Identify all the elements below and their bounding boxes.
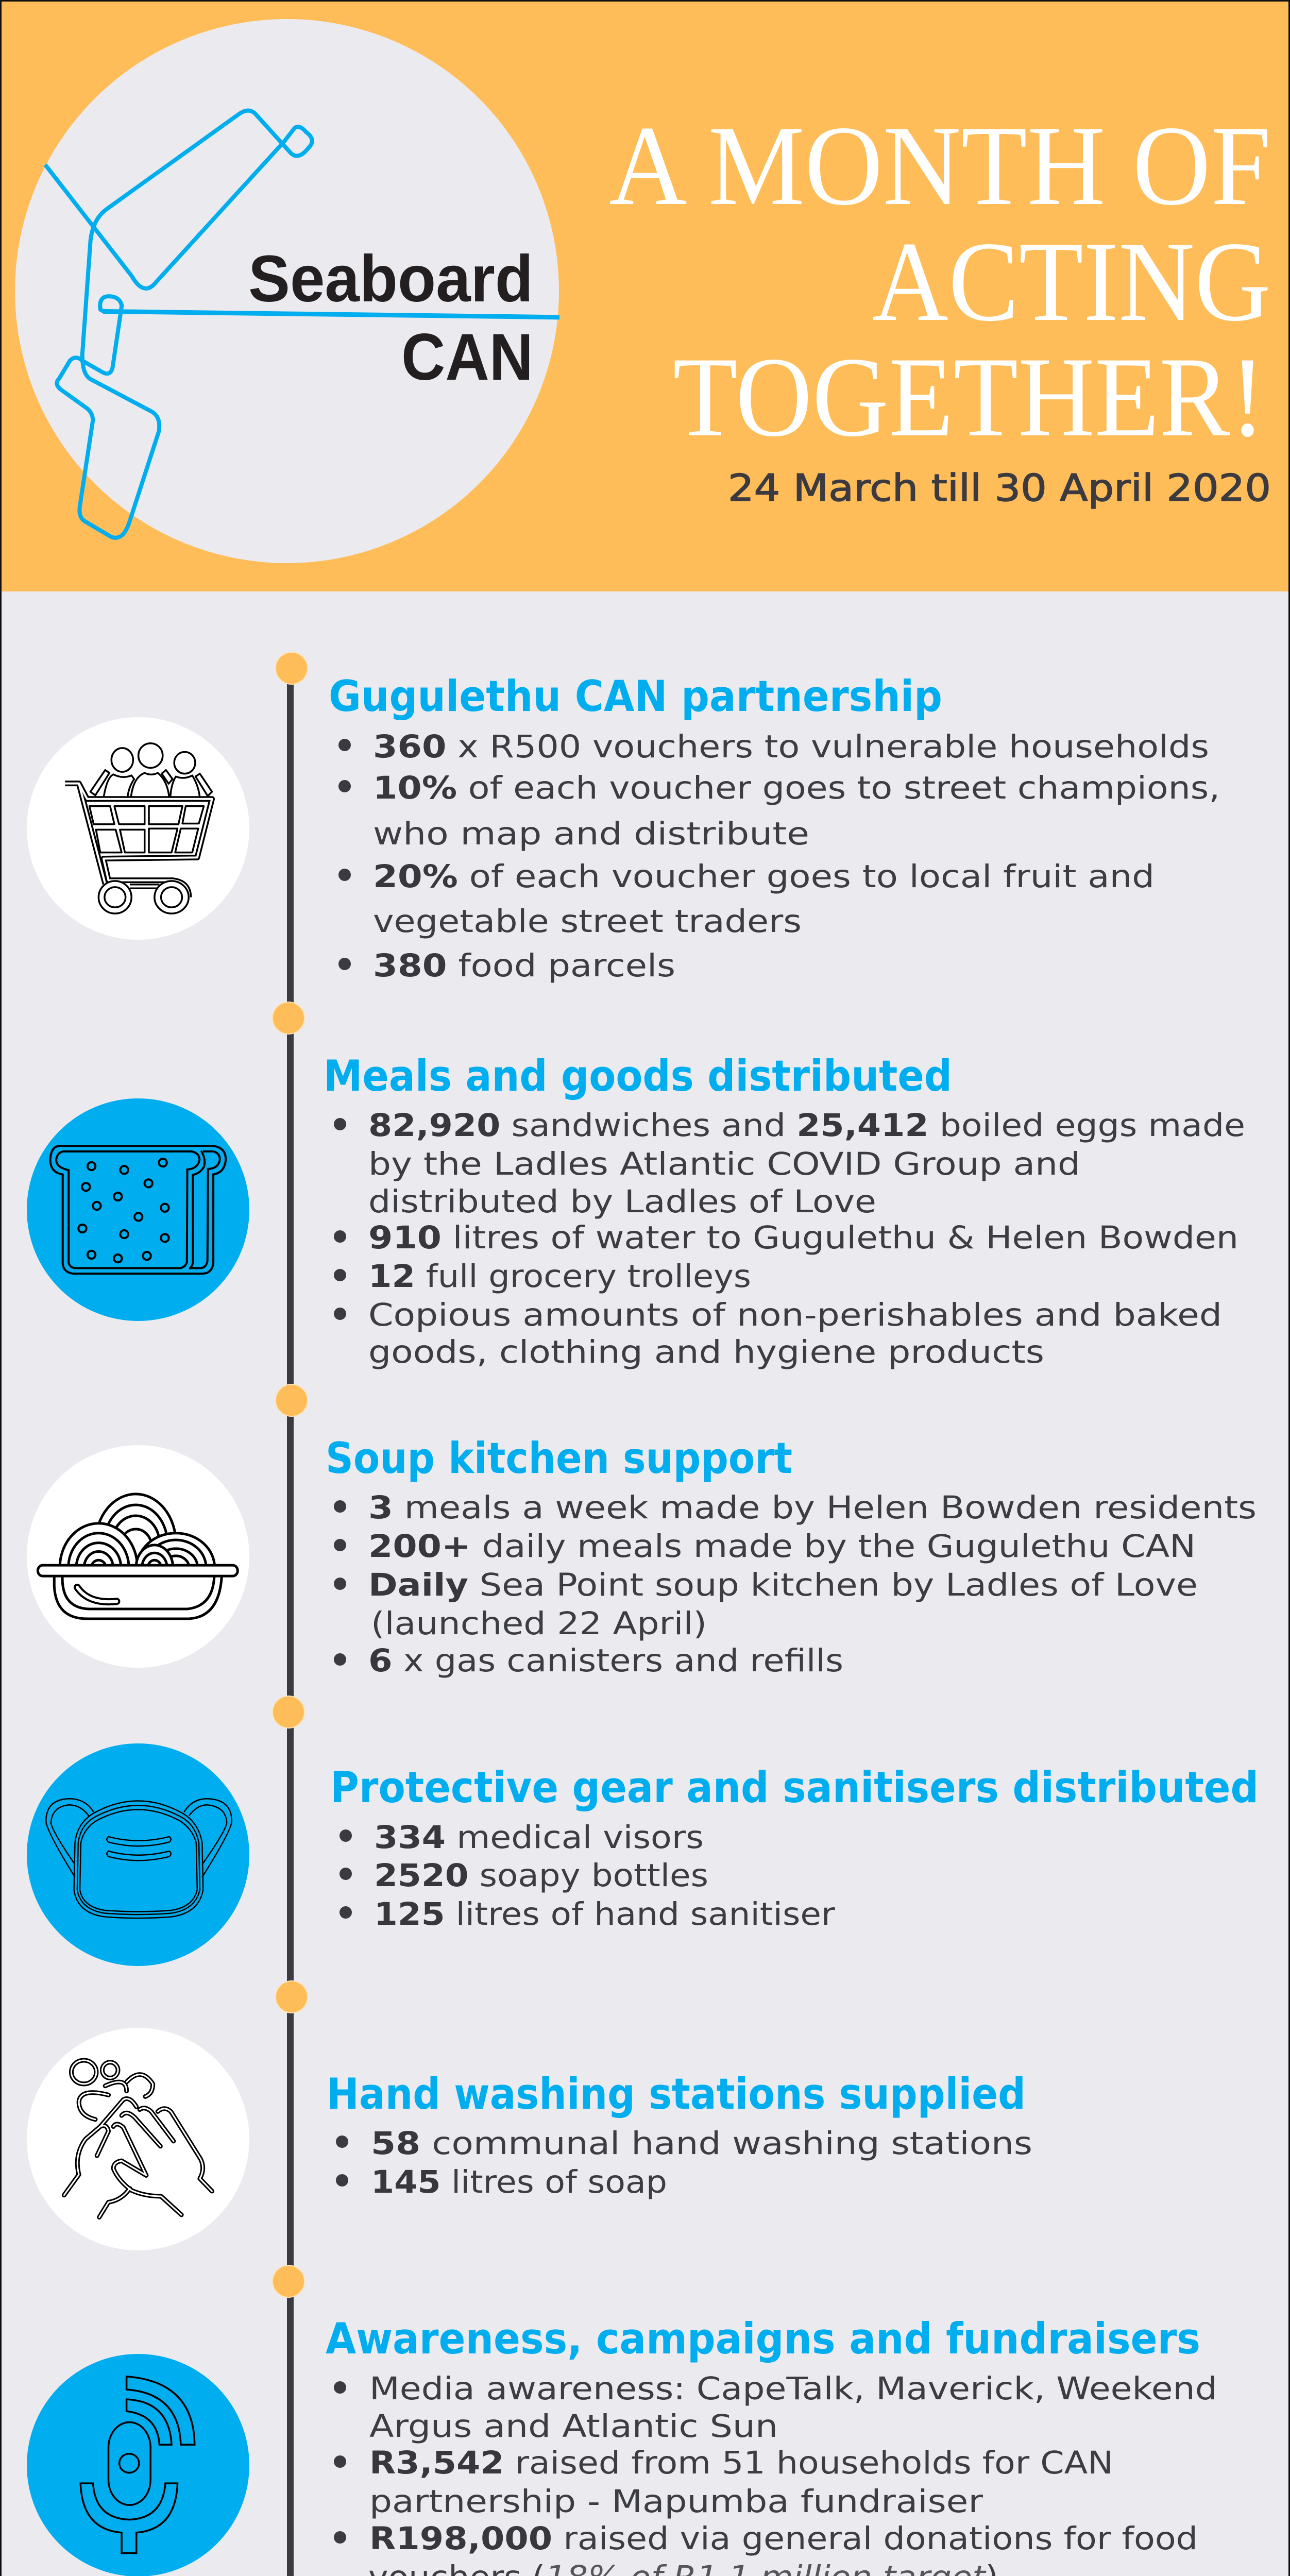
bullet list: 3 meals a week made by Helen Bowden residents (368, 1489, 1257, 1526)
logo: Seaboard CAN (15, 19, 559, 563)
heading: Hand washing stations supplied (327, 2069, 1026, 2119)
heading: Awareness, campaigns and fundraisers (326, 2314, 1200, 2364)
panel: Gugulethu CAN partnership (27, 671, 1220, 984)
bullet list: vegetable street traders (373, 903, 802, 940)
icon: bread slices (27, 1098, 249, 1321)
bullet list: 2520 soapy bottles (374, 1857, 708, 1894)
bullet list: Copious amounts of non-perishables and baked (368, 1297, 1222, 1333)
bullet list: R198,000 raised via general donations for food (369, 2520, 1198, 2557)
bullet list: partnership - Mapumba fundraiser (369, 2483, 983, 2520)
title (609, 103, 1271, 461)
bullet list: 200+ daily meals made by the Gugulethu CAN (368, 1528, 1196, 1565)
bullet list (340, 1819, 836, 1933)
bullet list (334, 1489, 1257, 1679)
bullet list: 58 communal hand washing stations (371, 2125, 1032, 2162)
bullet list: 12 full grocery trolleys (368, 1258, 751, 1295)
heading: Gugulethu CAN partnership (329, 671, 942, 721)
bullet list: Media awareness: CapeTalk, Maverick, Weekend (369, 2370, 1217, 2407)
bullet list: 10% of each voucher goes to street champions, (373, 770, 1220, 806)
bullet list (338, 728, 1220, 984)
panel: Protective gear and sanitisers distributed (27, 1743, 1259, 1966)
bullet list: by the Ladles Atlantic COVID Group and (368, 1146, 1080, 1182)
bullet list: 910 litres of water to Gugulethu & Helen Bowden (368, 1219, 1238, 1256)
icon: microphone (27, 2354, 249, 2576)
bullet list (336, 2125, 1032, 2200)
timeline (273, 652, 308, 2576)
icon: washing hands (27, 2028, 249, 2250)
bullet list: 145 litres of soap (371, 2164, 667, 2200)
bullet list: 360 x R500 vouchers to vulnerable households (373, 728, 1209, 765)
heading: Soup kitchen support (326, 1433, 792, 1483)
date range: 24 March till 30 April 2020 (728, 466, 1271, 510)
bullet list: R3,542 raised from 51 households for CAN (369, 2445, 1113, 2481)
bullet list: goods, clothing and hygiene products (368, 1334, 1044, 1370)
bullet list: 334 medical visors (374, 1819, 704, 1856)
icon: face mask (27, 1743, 249, 1966)
icon: bowl of noodles (27, 1445, 249, 1668)
bullet list: Daily Sea Point soup kitchen by Ladles of Love (368, 1567, 1198, 1603)
panel: Soup kitchen support (27, 1433, 1257, 1679)
bullet list (334, 2370, 1217, 2576)
title: A MONTH OF (609, 103, 1271, 229)
bullet list: 20% of each voucher goes to local fruit and (373, 858, 1155, 895)
bullet list (334, 1107, 1245, 1370)
bullet list: 82,920 sandwiches and 25,412 boiled eggs made (368, 1107, 1245, 1144)
bullet list: distributed by Ladles of Love (368, 1183, 876, 1220)
panel: Hand washing stations supplied (27, 2028, 1032, 2250)
bullet list: who map and distribute (373, 816, 809, 852)
logo: Seaboard CAN: CAN (401, 320, 533, 394)
panel: Meals and goods distributed (27, 1051, 1245, 1370)
bullet list: (launched 22 April) (371, 1605, 707, 1642)
bullet list: 6 x gas canisters and refills (368, 1642, 843, 1679)
panel: Awareness, campaigns and fundraisers (27, 2314, 1217, 2576)
icon: shopping cart with people (27, 717, 249, 940)
bullet list: Argus and Atlantic Sun (369, 2408, 778, 2445)
bullet list: 380 food parcels (373, 947, 675, 984)
heading: Meals and goods distributed (324, 1051, 952, 1101)
header band (0, 0, 1290, 591)
logo: Seaboard CAN: Seaboard (248, 242, 533, 316)
bullet list: 125 litres of hand sanitiser (374, 1896, 836, 1933)
